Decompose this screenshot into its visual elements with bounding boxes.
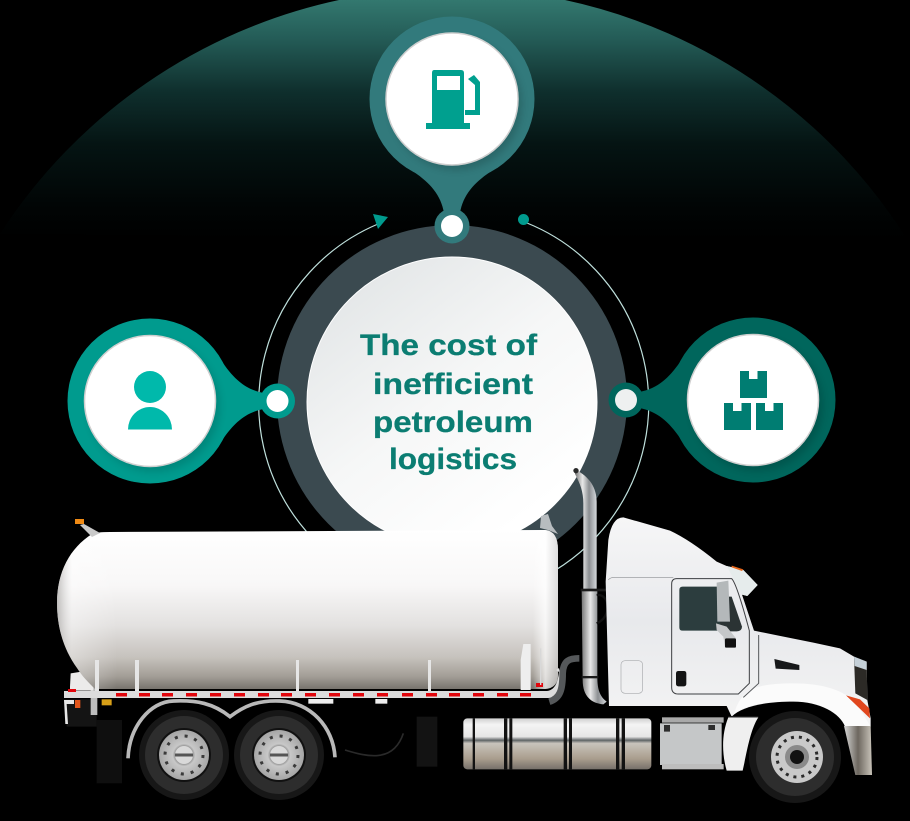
exhaust stack (575, 469, 597, 590)
bracket on tank end (521, 644, 531, 690)
front step fairing (723, 717, 758, 771)
door (672, 579, 749, 694)
side rail (64, 668, 560, 698)
title: petroleum (373, 406, 533, 439)
background glow dome (0, 0, 910, 244)
headlight (846, 695, 870, 718)
pin: person (68, 318, 295, 484)
rail markers (308, 699, 333, 704)
tank valve (540, 514, 558, 534)
pin: boxes (608, 318, 836, 482)
icon: person (128, 371, 172, 430)
lower exhaust (582, 591, 607, 704)
wheel arch (732, 702, 845, 770)
title: logistics (389, 443, 517, 476)
icon: boxes (724, 371, 783, 430)
grille (854, 657, 867, 700)
rear bracket (91, 682, 97, 715)
pin: fuel (370, 16, 534, 244)
tractor (463, 468, 872, 775)
front bumper (844, 726, 872, 775)
side posts (95, 660, 431, 693)
icon: fuel pump (426, 70, 480, 129)
fender (128, 701, 335, 758)
rear bumper block (64, 699, 97, 727)
mirror (717, 581, 730, 622)
tank body (57, 530, 558, 689)
front wheel (749, 711, 841, 803)
rear wheels (139, 710, 229, 800)
hood vent (774, 659, 799, 670)
title: The cost of (360, 329, 538, 362)
mudflap front (417, 717, 437, 767)
central dark ring (277, 225, 627, 575)
fuel tank (463, 718, 651, 769)
intake pipe (549, 658, 579, 702)
central disc with title (307, 257, 597, 547)
mudflap (97, 720, 122, 783)
cab body (606, 517, 871, 727)
hood shading (732, 683, 871, 727)
cab lines (608, 577, 673, 580)
title: inefficient (373, 368, 533, 401)
tanker truck (57, 468, 872, 803)
hose (345, 733, 403, 756)
grab handle (597, 595, 608, 623)
toolbox (660, 723, 722, 765)
cab window (679, 587, 720, 631)
title (360, 329, 538, 476)
trailer chassis and wheels (64, 672, 437, 783)
door handle (676, 671, 686, 686)
tank beacon (75, 519, 100, 537)
orbit line with arrow and dot (259, 214, 649, 599)
roof visor (727, 566, 758, 596)
